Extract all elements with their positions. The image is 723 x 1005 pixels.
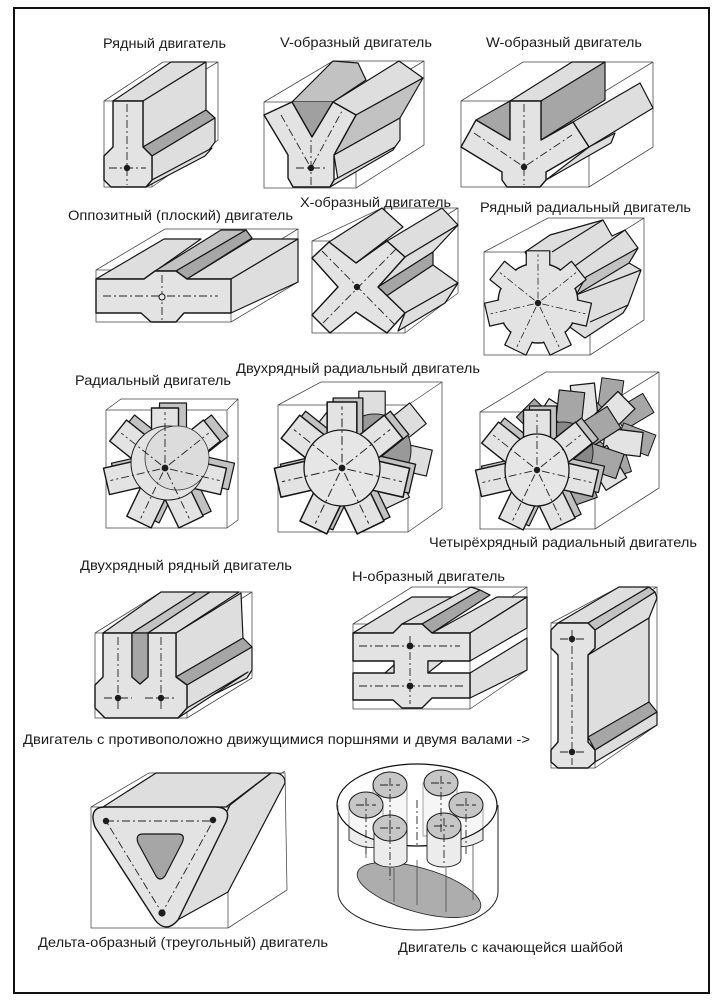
label: four-row radial engine: Четырёхрядный радиальный двигатель — [429, 534, 697, 550]
label: inline engine: Рядный двигатель — [103, 35, 226, 51]
label: inline radial engine: Рядный радиальный двигатель — [480, 199, 691, 215]
diagram: two-row radial engine — [274, 382, 442, 534]
label: radial engine: Радиальный двигатель — [75, 372, 231, 388]
label: opposed-piston engine: Двигатель с противоположно движущимися поршнями и двумя валами -> — [23, 731, 530, 747]
label: delta engine: Дельта-образный (треугольный) двигатель — [38, 934, 328, 950]
label: V engine: V-образный двигатель — [280, 34, 432, 50]
label: X engine: X-образный двигатель — [300, 194, 451, 210]
diagram: boxer engine — [96, 229, 298, 322]
label: two-row inline engine: Двухрядный рядный двигатель — [80, 557, 292, 573]
diagram: inline radial engine — [484, 218, 644, 355]
diagram: H engine — [353, 587, 527, 709]
diagram: delta engine — [91, 771, 287, 928]
label: H engine: H-образный двигатель — [352, 568, 505, 584]
diagram: opposed-piston engine — [551, 587, 657, 768]
diagram: two-row inline engine — [95, 592, 252, 718]
diagram: W engine — [461, 62, 653, 187]
diagram: four-row radial engine — [476, 372, 663, 530]
diagram: V engine — [264, 61, 424, 188]
diagram: radial engine — [104, 399, 238, 528]
diagram: swashplate engine — [337, 764, 498, 930]
label: swashplate engine: Двигатель с качающейся шайбой — [398, 939, 623, 955]
label: W engine: W-образный двигатель — [486, 34, 642, 50]
label: two-row radial engine: Двухрядный радиальный двигатель — [236, 360, 480, 376]
diagram: inline engine — [104, 62, 218, 187]
diagram: X engine — [312, 208, 458, 333]
label: boxer engine: Оппозитный (плоский) двигатель — [68, 207, 293, 223]
